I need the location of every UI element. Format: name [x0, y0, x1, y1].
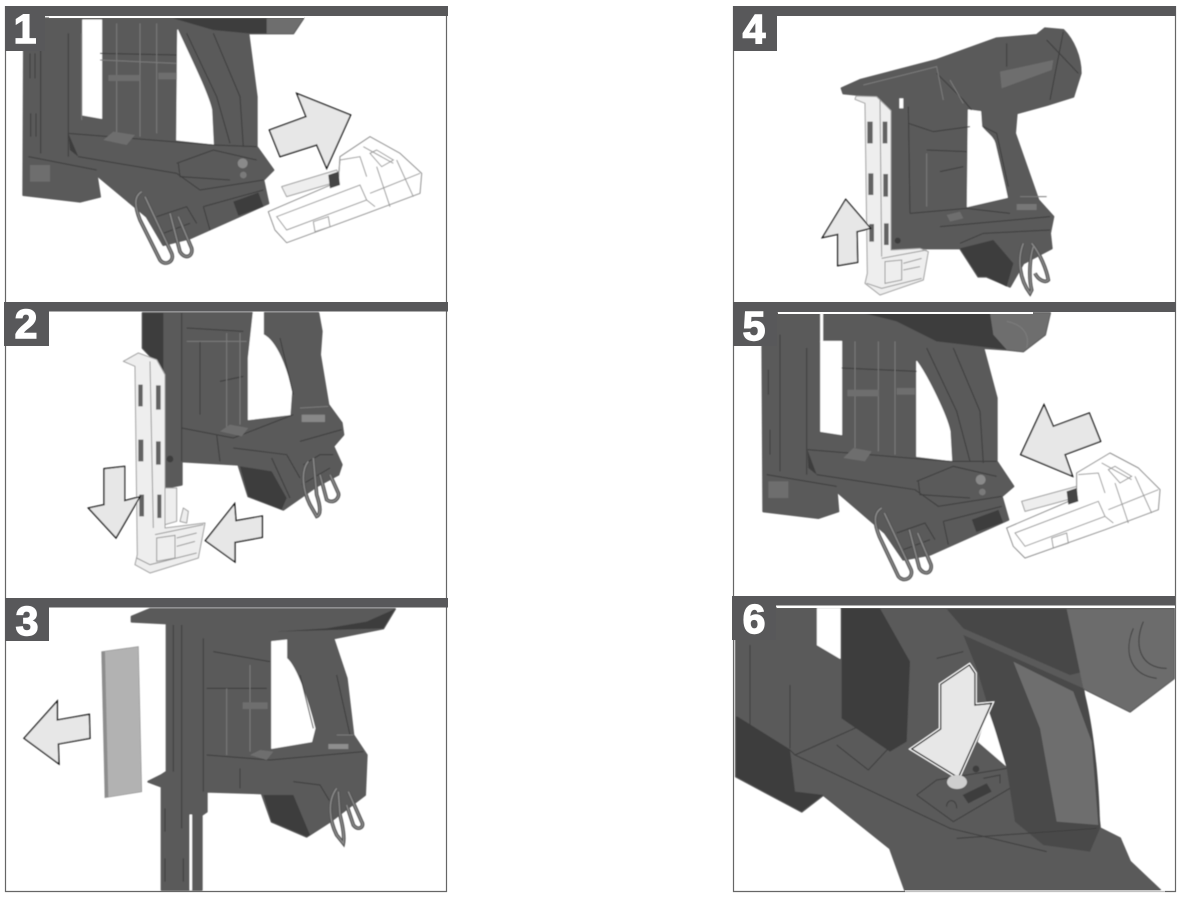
step number 6	[732, 596, 776, 642]
tool illustration, step 5	[762, 313, 1050, 560]
step number 1	[5, 6, 45, 52]
loops, step 5	[875, 508, 931, 579]
panel 5: install battery	[762, 313, 1160, 579]
loops, step 2	[303, 458, 339, 516]
battery, step 5	[1007, 453, 1160, 558]
magazine, step 4	[855, 96, 928, 295]
panel 1: remove battery	[23, 18, 422, 263]
staple strip	[102, 647, 142, 798]
arrow: up, step 4	[822, 199, 871, 266]
arrow: right, step 1	[269, 93, 351, 168]
arrow: left, step 5	[1021, 405, 1101, 476]
step number 4	[733, 6, 777, 52]
panel 4: reinsert magazine	[822, 28, 1081, 295]
step number 4: 4	[743, 6, 766, 52]
tool illustration, step 2	[143, 312, 343, 510]
loops, step 1	[136, 192, 192, 263]
tool illustration, step 1	[23, 18, 303, 245]
step number 3	[5, 598, 49, 644]
battery, step 1	[268, 137, 422, 243]
white lines below header bars	[49, 16, 1175, 608]
tool illustration, step 3	[132, 609, 395, 890]
step number 2	[4, 301, 49, 347]
arrow: left, step 3	[24, 701, 90, 764]
step number 5	[733, 302, 777, 349]
panel 2: remove magazine	[88, 312, 343, 573]
arrow: left, step 2	[205, 504, 262, 562]
step number 5: 5	[743, 303, 765, 349]
step number 6: 6	[743, 596, 765, 642]
magazine, step 2	[123, 353, 205, 573]
arrow: down, step 2	[88, 466, 140, 538]
tool illustration, step 6	[736, 608, 1174, 890]
panel 3: load staples	[24, 609, 395, 890]
button highlight	[947, 775, 967, 789]
header bars	[4, 6, 1176, 608]
step number 2: 2	[15, 301, 37, 347]
panel 6: press button	[736, 608, 1174, 890]
step number 3: 3	[16, 598, 38, 644]
arrow: down to button, step 6	[912, 665, 992, 778]
loops, step 4	[1020, 243, 1048, 293]
step number 1: 1	[14, 6, 36, 52]
loops, step 3	[330, 788, 363, 843]
tool illustration, step 4	[842, 28, 1081, 287]
